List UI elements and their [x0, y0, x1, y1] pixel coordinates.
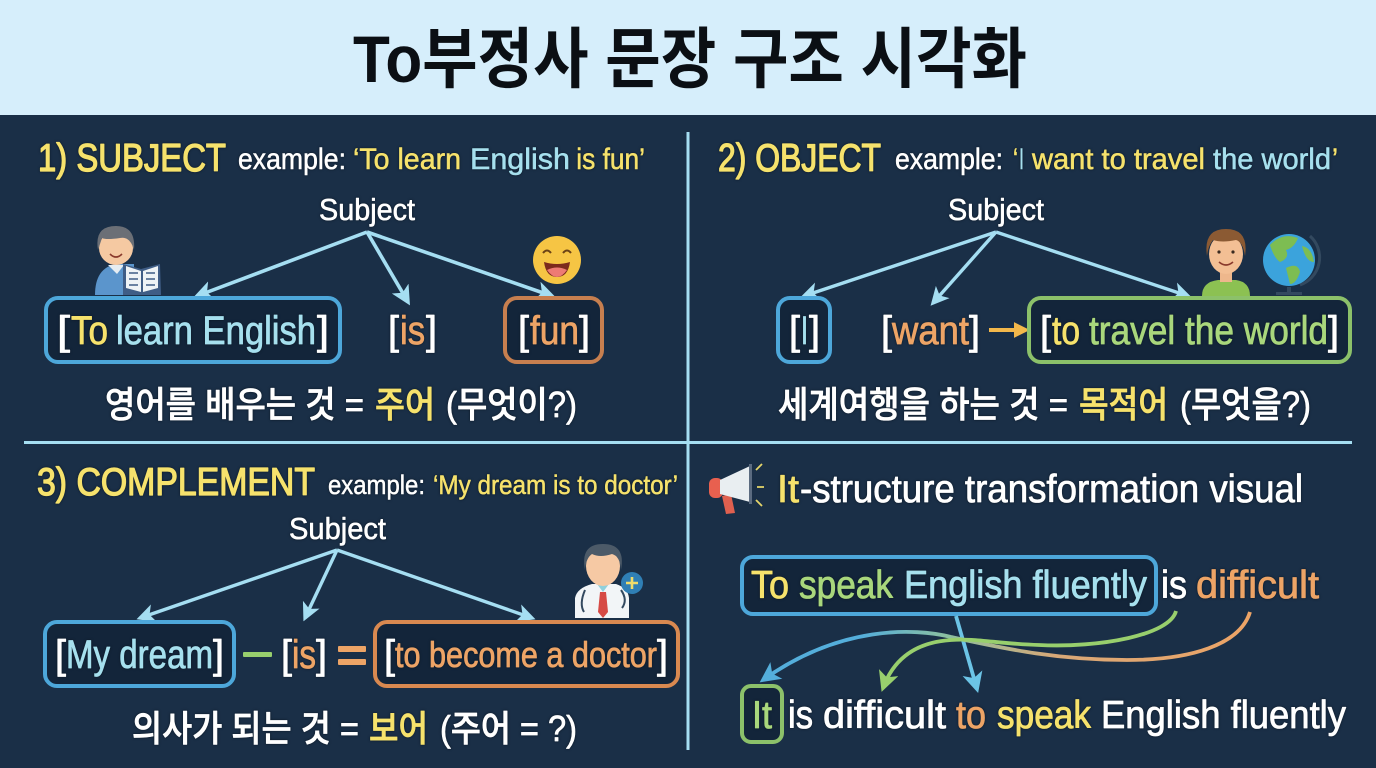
word: want: [ — [881, 309, 892, 353]
heading: complement: 3) COMPLEMENT — [37, 461, 315, 504]
arrows from subject — [804, 232, 1188, 303]
icon: student reading — [95, 226, 161, 295]
heading: it-structure: It — [777, 468, 799, 511]
icon: megaphone — [709, 464, 764, 514]
caption: object: (무엇을?) — [1180, 384, 1311, 425]
label: subject node: Subject — [319, 192, 415, 227]
box: original sentence — [742, 557, 1156, 614]
box: to become a doctor: [ — [384, 633, 395, 677]
word: is — [281, 633, 327, 677]
label: subject node: Subject — [948, 192, 1044, 227]
icon: smiling face — [533, 236, 581, 284]
icon: traveller — [1202, 229, 1250, 296]
panel: it-structure — [709, 464, 1346, 742]
text: is difficult: is — [1161, 564, 1187, 607]
panel: complement — [37, 461, 678, 749]
heading: object: ‘ — [1013, 143, 1018, 176]
word: is: is — [400, 309, 425, 353]
heading: subject: English — [470, 143, 570, 176]
box: to become a doctor — [375, 622, 678, 686]
arrows from subject — [140, 550, 532, 618]
arrow: want to object — [989, 328, 1025, 332]
heading: complement: ‘My dream is to doctor’ — [433, 470, 678, 500]
caption: subject: (무엇이?) — [446, 384, 577, 425]
box: fun: ] — [579, 309, 590, 353]
text: transformed sentence: is — [788, 694, 813, 737]
caption: object: 세계여행을 하는 것 = — [778, 384, 1068, 425]
icon: globe — [1263, 234, 1320, 295]
heading: object: ’ — [1332, 143, 1338, 176]
box: it: It — [752, 694, 772, 737]
arrow: difficult to it — [763, 612, 1250, 680]
box: I: I — [801, 309, 808, 353]
box: I: ] — [809, 309, 820, 353]
box: to travel the world: ] — [1328, 309, 1339, 353]
box: I — [778, 298, 830, 362]
caption: object: 목적어 — [1079, 384, 1168, 425]
text: transformed sentence: difficult — [823, 694, 946, 737]
text: transformed sentence: to — [956, 694, 986, 737]
box: fun: [ — [518, 309, 529, 353]
text: is difficult: difficult — [1196, 564, 1319, 607]
heading: subject: example: — [238, 143, 346, 176]
box: original sentence: To — [751, 564, 789, 607]
arrows from subject — [197, 232, 552, 302]
caption: complement — [132, 708, 577, 749]
heading: object: the world — [1213, 143, 1331, 176]
box: it — [742, 686, 782, 742]
heading: it-structure: -structure transformation visual — [800, 468, 1303, 511]
word: is: [ — [388, 309, 399, 353]
box: to become a doctor: ] — [657, 633, 668, 677]
heading: object: want to travel — [1031, 143, 1205, 176]
heading: subject: is fun’ — [569, 143, 645, 176]
box: to become a doctor: to become a doctor — [395, 634, 657, 675]
heading: object — [718, 137, 1338, 180]
title banner — [0, 0, 1376, 115]
box: my dream — [45, 622, 234, 686]
box: to learn english: learn English — [116, 309, 316, 353]
heading: object: 2) OBJECT — [718, 137, 881, 180]
word: want: want — [891, 309, 969, 353]
box: to learn english: ] — [317, 309, 329, 353]
box: my dream: My dream — [66, 633, 213, 677]
word: is — [388, 309, 437, 353]
box: original sentence: speak — [799, 564, 893, 607]
box: to travel the world: [ — [1040, 309, 1051, 353]
heading: object: I — [1019, 143, 1024, 176]
word: want: ] — [969, 309, 980, 353]
icon: doctor — [575, 544, 643, 618]
box: to learn english: To — [71, 309, 108, 353]
symbol: equals — [338, 646, 366, 665]
caption: complement: (주어 = ?) — [440, 708, 577, 749]
arrow: is to difficult — [883, 611, 1176, 688]
box: to learn english: [ — [57, 309, 70, 353]
word: is: ] — [426, 309, 437, 353]
heading: subject — [38, 137, 645, 180]
label: subject node: Subject — [289, 511, 386, 546]
heading: complement — [37, 461, 678, 504]
caption: complement: 의사가 되는 것 = — [132, 708, 359, 749]
heading: object: example: — [895, 143, 1003, 176]
box: my dream: ] — [213, 633, 224, 677]
heading: subject: ‘To learn — [353, 143, 461, 176]
box: fun: fun — [530, 309, 579, 353]
box: to travel the world: to — [1052, 309, 1080, 353]
caption: subject: 영어를 배우는 것 = — [105, 384, 364, 425]
title: To부정사 문장 구조 시각화 — [353, 22, 1027, 96]
heading: complement: example: — [328, 470, 425, 500]
text: transformed sentence — [788, 694, 1346, 737]
panel: subject — [38, 137, 645, 425]
text: transformed sentence: English fluently — [1101, 694, 1346, 737]
box: to learn english — [46, 298, 340, 362]
caption: subject: 주어 — [375, 384, 435, 425]
box: to travel the world: travel the world — [1089, 309, 1328, 353]
caption: object — [778, 384, 1311, 425]
word: is: ] — [316, 633, 327, 677]
box: my dream: [ — [55, 633, 66, 677]
text: transformed sentence: speak — [997, 694, 1091, 737]
caption: complement: 보어 — [369, 708, 428, 749]
box: I: [ — [789, 309, 800, 353]
heading: subject: 1) SUBJECT — [38, 137, 226, 180]
arrow: straight to fluently phrase — [956, 616, 977, 689]
word: is: is — [292, 633, 316, 677]
box: fun — [505, 298, 602, 362]
word: is: [ — [281, 633, 292, 677]
box: to travel the world — [1029, 298, 1350, 362]
symbol: dash — [243, 652, 272, 657]
box: original sentence: English fluently — [904, 564, 1147, 607]
caption: subject — [105, 384, 577, 425]
panel: object — [718, 137, 1350, 425]
